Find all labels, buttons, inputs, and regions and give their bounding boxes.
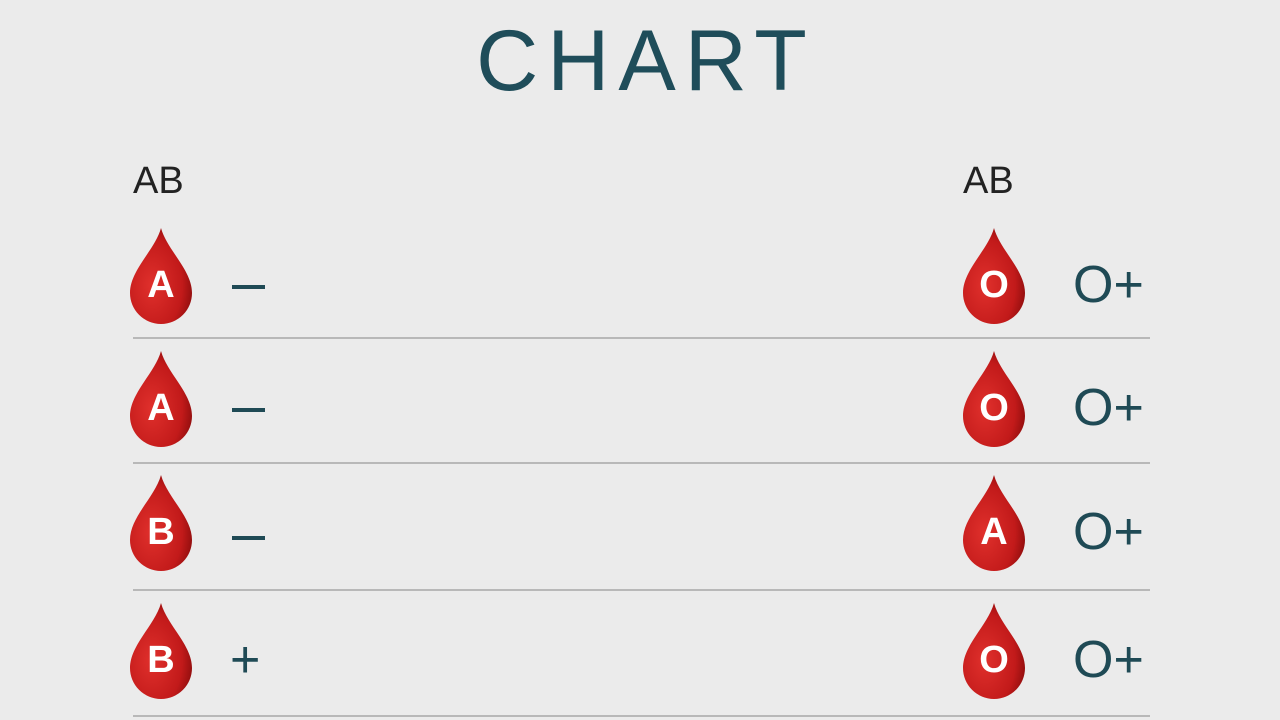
row 2: A [147, 387, 175, 429]
row 4: O+ [1073, 631, 1144, 689]
row 3: O+ [1073, 503, 1144, 561]
row 4: + [230, 631, 260, 689]
row 4 [130, 603, 1144, 699]
left header: AB [133, 160, 184, 202]
row 3 [130, 475, 1144, 571]
row 2: O [979, 387, 1009, 429]
icon: drop O: O [979, 264, 1009, 306]
icon: drop A [130, 228, 192, 324]
row 2: O+ [1073, 379, 1144, 437]
row 3: B [147, 511, 175, 553]
minus [232, 285, 265, 289]
row 1 [130, 228, 1144, 324]
right header: AB [963, 160, 1014, 202]
row 3: A [980, 511, 1008, 553]
title: CHART [476, 13, 816, 109]
row 4: B [147, 639, 175, 681]
row 4: O [979, 639, 1009, 681]
row lines [133, 337, 1150, 339]
icon: drop O [963, 228, 1025, 324]
icon: drop A: A [147, 264, 175, 306]
row 2 [130, 351, 1144, 447]
label O+: O+ [1073, 256, 1144, 314]
